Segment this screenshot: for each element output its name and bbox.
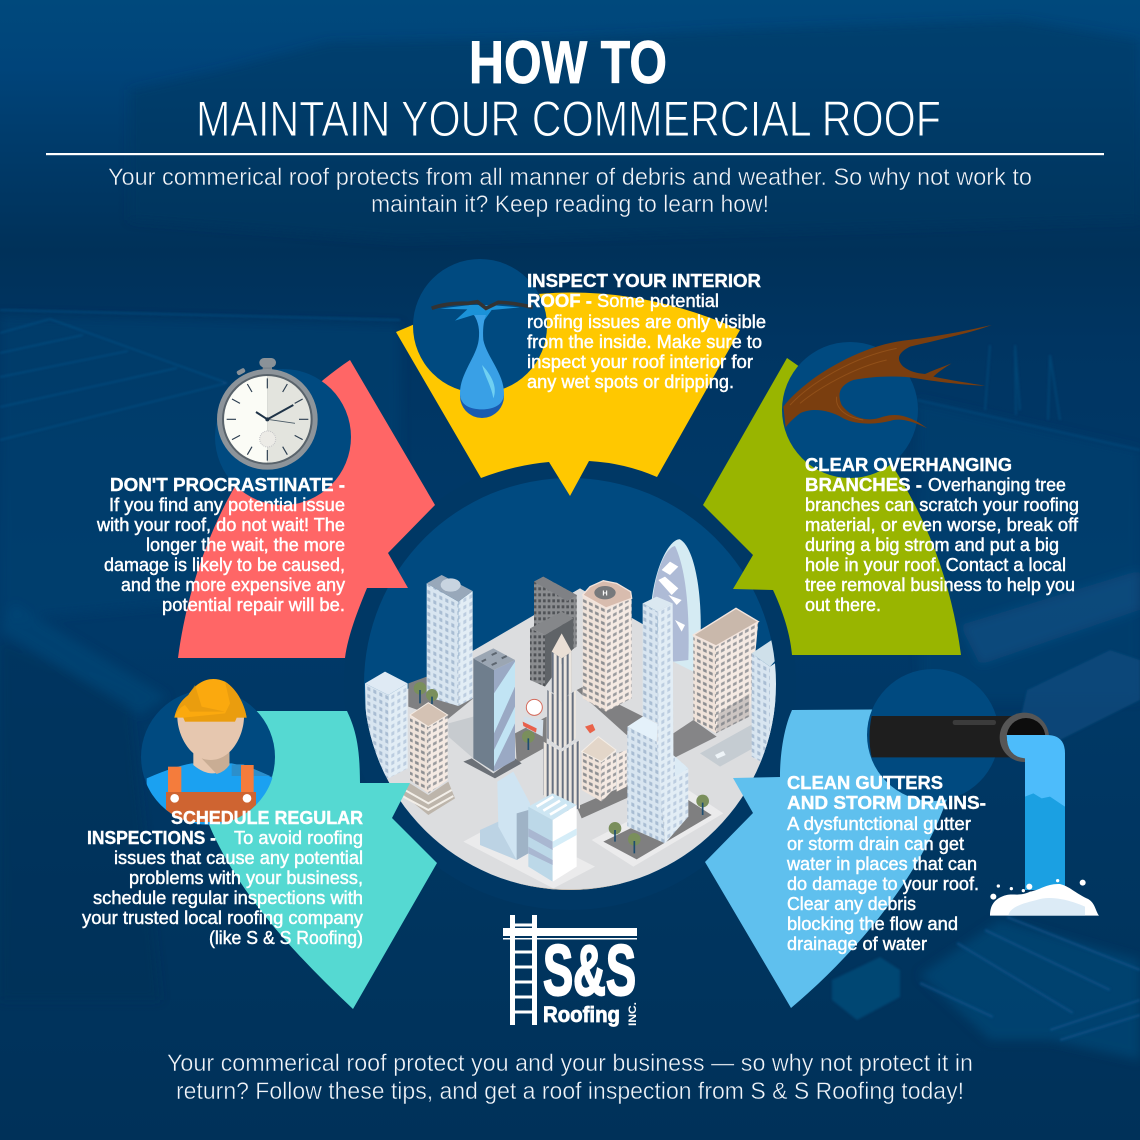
text: clean gutters and storm drains: or storm drain can get bbox=[787, 834, 964, 854]
tower B1 bbox=[427, 583, 458, 706]
panel: schedule inspections (teal) bbox=[141, 679, 437, 1009]
text: clean gutters and storm drains: CLEAN GUTTERS bbox=[787, 772, 943, 793]
text: clear overhanging branches: material, or even worse, break off bbox=[805, 515, 1079, 535]
helipad tower bbox=[583, 595, 606, 712]
intro text: Your commerical roof protects from all manner of debris and weather. So why not work to bbox=[108, 164, 1032, 191]
icon: pipe and water bbox=[869, 713, 1099, 916]
text: clear overhanging branches: CLEAR OVERHANGING bbox=[805, 454, 1012, 475]
panel: inspect interior (yellow) bbox=[396, 259, 740, 496]
text: inspect your interior roof: ROOF - bbox=[527, 290, 592, 311]
text: clean gutters and storm drains: do damage to your roof. bbox=[787, 874, 979, 894]
beige tower C bbox=[410, 715, 428, 793]
central circle with isometric city: H bbox=[602, 588, 608, 597]
icon: worker bbox=[147, 679, 273, 827]
text: schedule regular inspections: INSPECTIONS - bbox=[87, 827, 216, 848]
text: don't procrastinate bbox=[96, 474, 345, 615]
icon: water drop from crack bbox=[432, 302, 533, 418]
closing text: Your commerical roof protect you and your business — so why not protect it in bbox=[167, 1050, 973, 1077]
text: don't procrastinate: damage is likely to be caused, bbox=[104, 555, 345, 575]
text: inspect your interior roof: INSPECT YOUR INTERIOR bbox=[527, 270, 761, 291]
logo: S&S Roofing: S&S bbox=[543, 932, 636, 1011]
arch bbox=[652, 539, 701, 672]
text: schedule regular inspections: issues that cause any potential bbox=[114, 848, 363, 868]
text: clear overhanging branches: Overhanging tree bbox=[928, 475, 1066, 495]
text: clear overhanging branches: out there. bbox=[805, 595, 881, 615]
brown right tower bbox=[693, 635, 716, 733]
text: schedule regular inspections: schedule regular inspections with bbox=[93, 888, 363, 908]
central circle with isometric city bbox=[344, 458, 796, 920]
text: clean gutters and storm drains: blocking the flow and bbox=[787, 914, 958, 934]
text: don't procrastinate: and the more expensive any bbox=[121, 575, 345, 595]
icon: stopwatch bbox=[217, 358, 318, 470]
text: clean gutters and storm drains: AND STORM DRAINS- bbox=[787, 792, 986, 813]
text: clean gutters and storm drains: Clear any debris bbox=[787, 894, 916, 914]
text: clean gutters and storm drains: water in places that can bbox=[786, 854, 977, 874]
text: clear overhanging branches: BRANCHES - bbox=[805, 474, 922, 495]
text: schedule regular inspections bbox=[82, 807, 363, 948]
text: inspect your interior roof: inspect your roof interior for bbox=[527, 352, 753, 372]
text: don't procrastinate: If you find any potential issue bbox=[109, 495, 345, 515]
text: schedule regular inspections: (like S & S Roofing) bbox=[209, 928, 363, 948]
text: don't procrastinate: with your roof, do not wait! The bbox=[96, 515, 345, 535]
text: inspect your interior roof: roofing issues are only visible bbox=[527, 312, 766, 332]
spire tower bbox=[543, 742, 562, 798]
title: MAINTAIN YOUR COMMERCIAL ROOF bbox=[196, 91, 941, 147]
shop with clock bbox=[523, 717, 543, 737]
text: inspect your interior roof bbox=[527, 270, 766, 392]
glass tower D bbox=[473, 658, 494, 772]
building A bbox=[365, 683, 388, 778]
icon: tree branch bbox=[783, 325, 992, 428]
tall pale tower bbox=[643, 603, 658, 723]
intro text: maintain it? Keep reading to learn how! bbox=[371, 191, 769, 218]
title: HOW TO bbox=[469, 29, 667, 96]
far right tower bbox=[752, 653, 770, 767]
panel: clear branches (green) bbox=[703, 325, 992, 655]
logo: S&S Roofing: INC. bbox=[627, 1002, 639, 1026]
text: schedule regular inspections: SCHEDULE REGULAR bbox=[171, 807, 363, 828]
intro text bbox=[108, 164, 1032, 218]
text: clear overhanging branches bbox=[805, 454, 1079, 615]
text: clean gutters and storm drains: A dysfuntctional gutter bbox=[787, 814, 971, 834]
low beige block bbox=[617, 750, 627, 792]
text: don't procrastinate: longer the wait, the more bbox=[146, 535, 345, 555]
text: clear overhanging branches: during a big strom and put a big bbox=[805, 535, 1059, 555]
panel: clean gutters (blue) bbox=[705, 669, 1099, 1008]
trees bbox=[414, 682, 709, 846]
text: schedule regular inspections: your trusted local roofing company bbox=[82, 908, 363, 928]
logo: S&S Roofing bbox=[503, 915, 639, 1027]
text: don't procrastinate: DON'T PROCRASTINATE - bbox=[110, 474, 345, 495]
closing text: return? Follow these tips, and get a roof inspection from S & S Roofing today! bbox=[176, 1078, 964, 1105]
text: inspect your interior roof: from the inside. Make sure to bbox=[527, 332, 762, 352]
front glass block bbox=[480, 822, 517, 860]
text: schedule regular inspections: To avoid roofing bbox=[234, 828, 363, 848]
text: inspect your interior roof: any wet spots or dripping. bbox=[527, 372, 734, 392]
text: schedule regular inspections: problems with your business, bbox=[129, 868, 363, 888]
closing text bbox=[167, 1050, 973, 1105]
title bbox=[196, 29, 941, 147]
panel: don't procrastinate (red) bbox=[178, 358, 435, 658]
text: don't procrastinate: potential repair will be. bbox=[162, 595, 345, 615]
text: clear overhanging branches: branches can scratch your roofing bbox=[805, 495, 1079, 515]
text: clear overhanging branches: hole in your roof. Contact a local bbox=[805, 555, 1066, 575]
logo: S&S Roofing: Roofing bbox=[543, 1002, 620, 1027]
back dark buildings bbox=[534, 577, 577, 653]
text: clean gutters and storm drains bbox=[786, 772, 986, 954]
text: inspect your interior roof: Some potential bbox=[597, 291, 719, 311]
text: clean gutters and storm drains: drainage of water bbox=[787, 934, 927, 954]
text: clear overhanging branches: tree removal business to help you bbox=[805, 575, 1075, 595]
